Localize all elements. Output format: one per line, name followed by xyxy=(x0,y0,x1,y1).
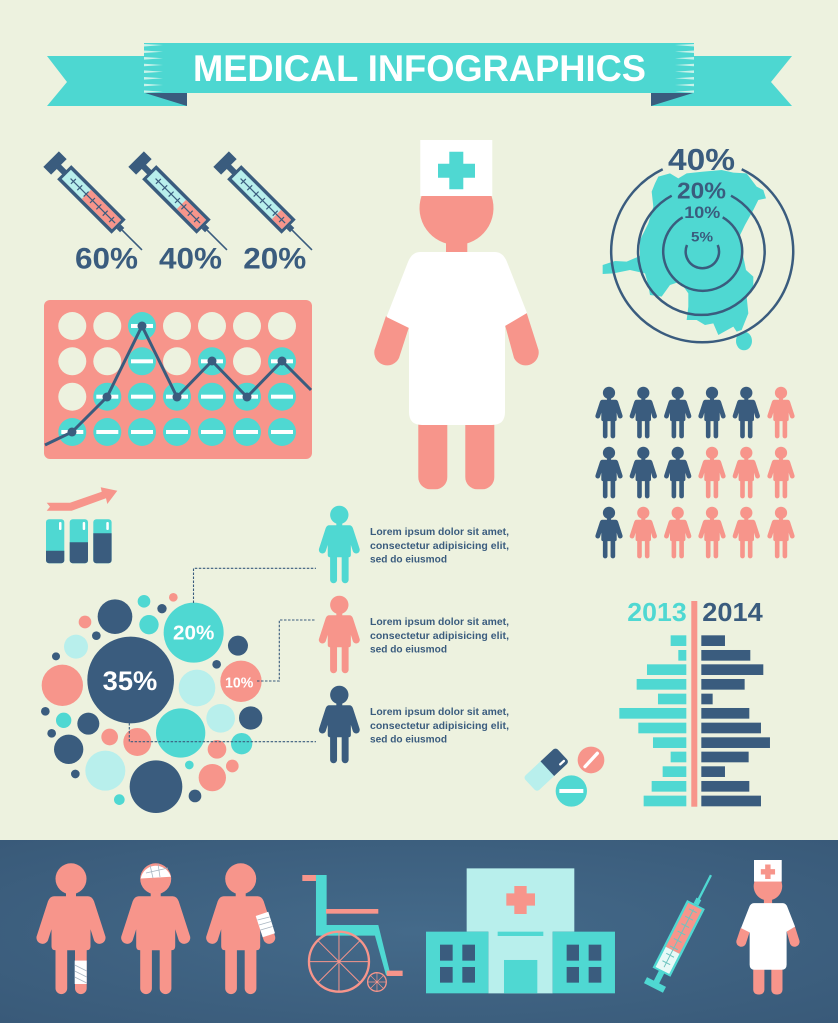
small nurse xyxy=(736,860,800,994)
teal person xyxy=(319,506,360,583)
lorem text block 1: sed do eiusmod xyxy=(370,554,447,566)
lorem text block 1: Lorem ipsum dolor sit amet, xyxy=(370,526,509,538)
syringe 60% xyxy=(43,151,150,258)
patient with bandaged head xyxy=(121,863,190,994)
syringe 20% xyxy=(213,151,320,258)
dashed connectors xyxy=(129,568,316,742)
door xyxy=(504,960,537,993)
title ribbon xyxy=(47,43,792,106)
people pictogram grid xyxy=(595,387,795,558)
lorem text block 2: sed do eiusmod xyxy=(370,644,447,656)
lorem text block 3: consectetur adipisicing elit, xyxy=(370,720,509,732)
butterfly bar chart xyxy=(619,597,770,807)
empty pill slots xyxy=(58,312,296,411)
armrest xyxy=(326,909,378,914)
country map xyxy=(603,170,766,350)
teal pill xyxy=(556,775,587,807)
lorem text block 3: sed do eiusmod xyxy=(370,734,447,746)
label 40%: 40% xyxy=(159,242,222,275)
arrow up xyxy=(47,487,117,511)
bubble label 35%: 35% xyxy=(103,666,157,696)
lorem text block 3 xyxy=(370,706,509,746)
lorem text block 2 xyxy=(370,616,509,656)
hospital xyxy=(426,868,615,993)
label 20%: 20% xyxy=(243,242,306,275)
lorem text block 2: Lorem ipsum dolor sit amet, xyxy=(370,616,509,628)
dark person xyxy=(319,686,360,763)
pink people xyxy=(630,387,795,558)
bubble chart xyxy=(41,593,262,813)
main block xyxy=(467,868,574,993)
ribbon centre band xyxy=(144,43,694,93)
lorem text block 1: consectetur adipisicing elit, xyxy=(370,540,509,552)
small nurse cross xyxy=(761,865,775,879)
pack background xyxy=(44,300,312,459)
line chart xyxy=(45,326,311,445)
large wheel xyxy=(309,932,369,992)
dark people xyxy=(595,387,760,558)
right wing xyxy=(553,932,615,993)
person and text rows xyxy=(319,506,509,763)
vial 2 xyxy=(70,519,88,563)
vial 1 xyxy=(46,519,64,563)
bubble label 20%: 20% xyxy=(173,622,215,644)
lorem text block 2: consectetur adipisicing elit, xyxy=(370,630,509,642)
small wheel xyxy=(368,973,386,991)
patient with bandaged leg xyxy=(36,863,106,994)
pink pill xyxy=(578,747,604,773)
wheelchair xyxy=(302,875,403,992)
title: MEDICAL INFOGRAPHICS xyxy=(193,48,646,89)
head bandage xyxy=(141,864,171,878)
handle xyxy=(302,875,316,881)
ribbon left fold xyxy=(145,93,187,106)
line chart points xyxy=(68,322,286,436)
ring label 40%: 40% xyxy=(668,142,735,177)
ribbon right fold xyxy=(651,93,693,106)
rings xyxy=(611,169,793,342)
year 2014: 2014 xyxy=(702,597,763,627)
large nurse figure xyxy=(374,140,539,489)
bubbles xyxy=(41,593,262,813)
syringes with percentages xyxy=(43,151,320,275)
three vials xyxy=(46,519,112,563)
chair frame xyxy=(316,875,391,975)
pill score marks xyxy=(61,324,293,434)
leg bandage xyxy=(75,961,87,984)
pills icon xyxy=(523,747,604,807)
ribbon left tail xyxy=(47,56,187,106)
syringe 40% xyxy=(128,151,235,258)
vial 3 xyxy=(93,519,112,563)
ribbon fringe xyxy=(144,44,694,93)
ribbon right tail xyxy=(651,56,792,106)
footrest xyxy=(387,971,403,976)
bottom band xyxy=(0,840,838,1023)
year 2013: 2013 xyxy=(627,597,687,627)
2014 bars xyxy=(701,635,770,806)
arm bandage xyxy=(256,912,275,937)
bottom syringe xyxy=(644,870,720,993)
canopy xyxy=(498,932,543,936)
2013 bars xyxy=(619,635,686,806)
label 60%: 60% xyxy=(75,242,138,275)
ring label 20%: 20% xyxy=(677,177,726,203)
pink person xyxy=(319,596,360,673)
windows xyxy=(440,945,601,983)
patient with bandaged arm xyxy=(206,863,275,994)
hospital cross xyxy=(506,886,535,914)
lorem text block 3: Lorem ipsum dolor sit amet, xyxy=(370,706,509,718)
ring label 10%: 10% xyxy=(684,203,720,222)
nurse hat cross xyxy=(438,152,475,189)
filled pills xyxy=(58,312,296,446)
bubble label 10%: 10% xyxy=(225,674,253,691)
centre axis xyxy=(691,601,697,807)
left wing xyxy=(426,932,488,993)
map with concentric rings xyxy=(603,142,793,350)
ring label 5%: 5% xyxy=(691,229,714,245)
lorem text block 1 xyxy=(370,526,509,566)
pill pack line chart xyxy=(44,300,312,459)
capsule xyxy=(523,747,569,792)
